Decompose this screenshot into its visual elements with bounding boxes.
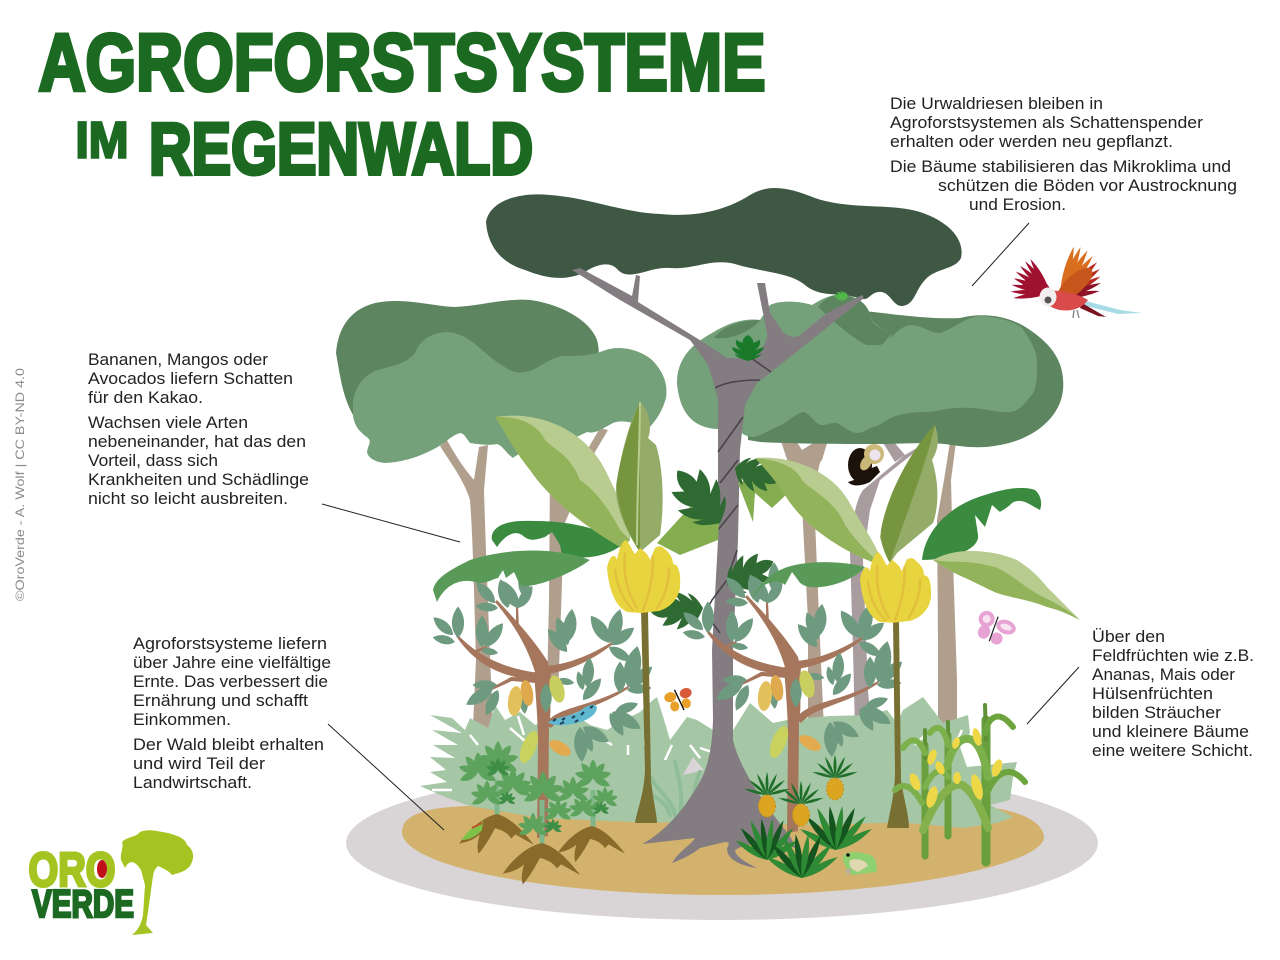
banana plant right: [752, 425, 1080, 828]
text block: Bananen: Krankheiten und Schädlinge: [88, 470, 309, 489]
text block: Ernte: Agroforstsysteme liefern: [133, 634, 327, 653]
stems: [922, 745, 928, 856]
vine leaves: [650, 335, 785, 631]
lower leaf: [433, 551, 590, 602]
cassava plants: [458, 741, 625, 884]
right dark green leaf: [922, 488, 1041, 560]
head: [1040, 288, 1056, 306]
text block: Feldfrüchte: Hülsenfrüchten: [1092, 684, 1213, 703]
text block: Feldfrüchte: Ananas, Mais oder: [1092, 665, 1235, 684]
text block: Feldfrüchte: Über den: [1092, 627, 1165, 646]
text block: Ernte: Einkommen.: [133, 710, 231, 729]
text block: Ernte: Der Wald bleibt erhalten: [133, 735, 324, 754]
text block: Ernte: und wird Teil der: [133, 754, 265, 773]
cocoa tree right: [680, 562, 906, 833]
butterfly pink: [972, 609, 1019, 649]
text block: Bananen: Bananen, Mangos oder: [88, 350, 268, 369]
monkey: [848, 444, 884, 485]
upright leaf: [880, 425, 938, 563]
tree frog / lizard on branch: [548, 705, 597, 725]
text block: Ernte: Ernte. Das verbessert die: [133, 672, 328, 691]
text block: Bananen: Avocados liefern Schatten: [88, 369, 293, 388]
text block: Bananen: nebeneinander, hat das den: [88, 432, 306, 451]
banana hand: [860, 552, 931, 623]
stems: [497, 780, 593, 845]
leader line: Bananen: [322, 504, 460, 542]
stem: [887, 620, 909, 828]
left wing: [1011, 258, 1052, 300]
text block: Urwaldriesen: Die Urwaldriesen bleiben in: [890, 94, 1103, 113]
ground: grey outer ring: [346, 766, 1098, 920]
frog: [843, 852, 877, 876]
big tree crown: [486, 188, 962, 306]
text block: Bananen: Vorteil, dass sich: [88, 451, 218, 470]
leader line: Urwaldriesen: [972, 223, 1029, 286]
leader line: Feldfrüchte: [1027, 667, 1079, 724]
text block: Bananen: für den Kakao.: [88, 388, 203, 407]
dark green leaf: [492, 521, 622, 558]
logo: OroVerde: VERDE: [32, 883, 134, 926]
mounds: [459, 814, 534, 854]
text block: Bananen: Wachsen viele Arten: [88, 413, 248, 432]
text block: Bananen: nicht so leicht ausbreiten.: [88, 489, 288, 508]
background shrubs: [420, 697, 1017, 828]
parrot: [1011, 246, 1142, 318]
corn cobs: [907, 727, 1004, 809]
leaves: [895, 728, 948, 803]
text block: Ernte: [133, 634, 331, 792]
title: AGROFORSTSYSTEME: [38, 18, 766, 108]
pineapple plants: [734, 754, 873, 881]
left leaf: [752, 562, 865, 600]
logo: OroVerde: [28, 830, 193, 935]
corn plants: [895, 705, 1025, 862]
text block: Urwaldriesen: schützen die Böden vor Austrocknung: [938, 176, 1237, 195]
big tree trunk and branches: [572, 268, 864, 868]
large light leaf: [495, 416, 630, 548]
text block: Bananen: [88, 350, 309, 508]
ground: soil: [402, 806, 1044, 895]
palmate leaves: [458, 741, 618, 837]
text block: Feldfrüchte: eine weitere Schicht.: [1092, 741, 1253, 760]
copyright: ©OroVerde - A. Wolf | CC BY-ND 4.0: [13, 368, 27, 601]
lime banana leaves behind vine: [657, 470, 788, 555]
text block: Ernte: Ernährung und schafft: [133, 691, 308, 710]
text block: Urwaldriesen: Die Bäume stabilisieren das Mikroklima und: [890, 157, 1231, 176]
feet: [1073, 310, 1079, 318]
text block: Urwaldriesen: [890, 94, 1237, 214]
mid canopy right: [677, 295, 1063, 447]
leader line: Ernte: [328, 724, 444, 830]
tail: [1082, 300, 1142, 314]
right wing: [1053, 246, 1102, 305]
lime leaf on branch: [834, 291, 848, 301]
logo: OroVerde: ORO: [28, 844, 116, 897]
text block: Urwaldriesen: Agroforstsystemen als Schattenspender: [890, 113, 1203, 132]
text block: Urwaldriesen: erhalten oder werden neu gepflanzt.: [890, 132, 1173, 151]
body: [1042, 290, 1088, 311]
upright leaf: [616, 402, 663, 552]
mid canopy left: [336, 300, 666, 463]
text block: Feldfrüchte: bilden Sträucher: [1092, 703, 1221, 722]
green lizard on mound: [462, 821, 483, 840]
stem: [635, 610, 657, 823]
text block: Ernte: Landwirtschaft.: [133, 773, 252, 792]
large light leaf: [755, 458, 882, 565]
text block: Ernte: über Jahre eine vielfältige: [133, 653, 331, 672]
banana hand: [607, 540, 680, 613]
right light leaf: [933, 551, 1080, 620]
title: REGENWALD: [149, 109, 533, 190]
text block: Urwaldriesen: und Erosion.: [969, 195, 1066, 214]
cocoa tree left: [430, 567, 656, 838]
butterfly orange: [663, 686, 696, 714]
title: [38, 18, 766, 190]
text block: Feldfrüchte: Feldfrüchten wie z.B.: [1092, 646, 1254, 665]
banana plant left: [433, 402, 680, 823]
background tree trunks: [440, 415, 965, 738]
text block: Feldfrüchte: [1092, 627, 1254, 760]
text block: Feldfrüchte: und kleinere Bäume: [1092, 722, 1249, 741]
title: IM: [76, 112, 128, 168]
